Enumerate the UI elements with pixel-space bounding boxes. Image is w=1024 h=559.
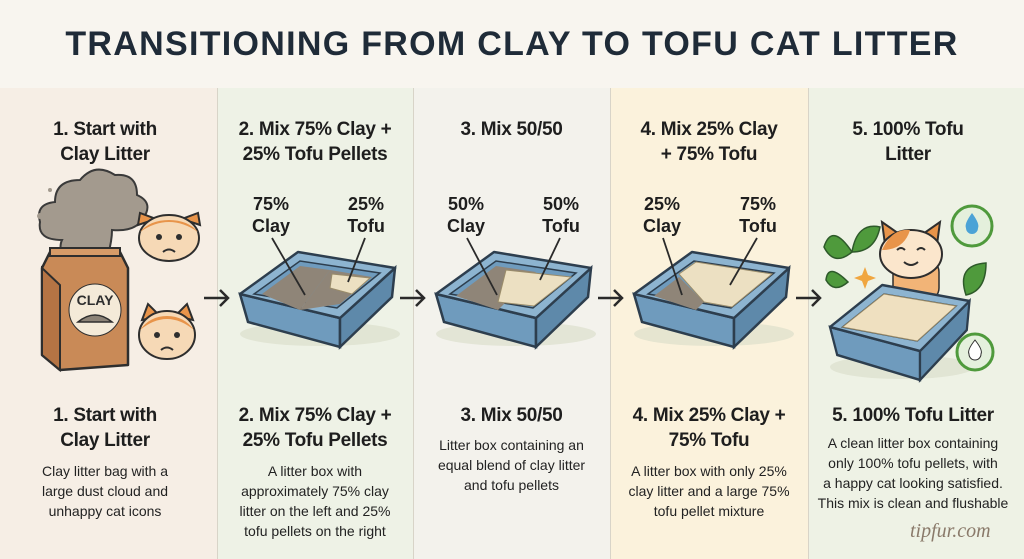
step 1 heading <box>53 119 157 165</box>
icon: leaves <box>824 226 986 295</box>
step 2 heading: 25% Tofu Pellets <box>243 144 387 165</box>
step 2 labels: 75% <box>253 194 289 214</box>
step 2 litter box <box>240 252 400 347</box>
arrows <box>204 290 820 306</box>
step 5 heading: 5. 100% Tofu <box>852 119 964 140</box>
step 4 heading: + 75% Tofu <box>661 144 757 165</box>
icon: unhappy cat bottom <box>139 304 195 359</box>
step 5 bottom text: a happy cat looking satisfied. <box>823 475 1003 491</box>
step 2 bottom text: 25% Tofu Pellets <box>243 430 387 451</box>
step 1 bottom text <box>42 405 168 519</box>
step 2 bottom text: approximately 75% clay <box>241 483 389 499</box>
step 5 happy cat <box>880 222 942 300</box>
step 3 labels: Clay <box>447 216 485 236</box>
step 5 bottom text: only 100% tofu pellets, with <box>828 455 998 471</box>
step 1 bottom text: large dust cloud and <box>42 483 168 499</box>
step 4 labels: Tofu <box>739 216 777 236</box>
step 3 bottom text: and tofu pellets <box>464 477 559 493</box>
step 3 labels: 50% <box>543 194 579 214</box>
step 5 bottom text: A clean litter box containing <box>828 435 998 451</box>
step 3 labels <box>447 194 580 236</box>
step 5 heading <box>852 119 964 165</box>
watermark: tipfur.com <box>910 520 991 542</box>
step 4 heading <box>640 119 778 165</box>
step 2 bottom text: tofu pellets on the right <box>244 523 386 539</box>
step 3 bottom text: equal blend of clay litter <box>438 457 585 473</box>
icon: water drop circle <box>952 206 992 246</box>
step 5 bottom text <box>818 405 1008 511</box>
step 4 bottom text: 75% Tofu <box>669 430 749 451</box>
step 1 bottom text: unhappy cat icons <box>49 503 161 519</box>
step 4 bottom text: clay litter and a large 75% <box>628 483 790 499</box>
step 3 bottom text: 3. Mix 50/50 <box>460 405 563 426</box>
step 3 bottom text <box>438 405 585 493</box>
step 2 bottom text: A litter box with <box>268 463 362 479</box>
step 1 heading: Clay Litter <box>60 144 150 165</box>
step 4 bottom text: A litter box with only 25% <box>631 463 787 479</box>
step 2 heading: 2. Mix 75% Clay + <box>239 119 391 140</box>
step 5 bottom text: 5. 100% Tofu Litter <box>832 405 994 426</box>
step 3 labels: 50% <box>448 194 484 214</box>
step 1 heading: 1. Start with <box>53 119 157 140</box>
icon: unhappy cat top <box>138 213 200 261</box>
step 5 litter box <box>830 285 974 380</box>
step 2 labels: 25% <box>348 194 384 214</box>
illustrations <box>37 168 994 383</box>
icon: flushable drop circle <box>957 334 993 370</box>
step 4 labels: 75% <box>740 194 776 214</box>
step 2 labels <box>252 194 385 236</box>
step 3 litter box <box>436 252 596 347</box>
step 1 bottom text: 1. Start with <box>53 405 157 426</box>
step 2 labels: Tofu <box>347 216 385 236</box>
step 3 labels: Tofu <box>542 216 580 236</box>
step 4 labels: Clay <box>643 216 681 236</box>
step 4 heading: 4. Mix 25% Clay <box>640 119 778 140</box>
step 2 labels: Clay <box>252 216 290 236</box>
step 4 litter box <box>634 252 794 347</box>
step 2 bottom text <box>239 405 391 539</box>
step 1 bottom text: Clay litter bag with a <box>42 463 168 479</box>
step 4 bottom text: 4. Mix 25% Clay + <box>633 405 785 426</box>
step 5 heading: Litter <box>885 144 931 165</box>
step 2 bottom text: 2. Mix 75% Clay + <box>239 405 391 426</box>
step 4 bottom text <box>628 405 790 519</box>
step 3 bottom text: Litter box containing an <box>439 437 584 453</box>
step 1 bottom text: Clay Litter <box>60 430 150 451</box>
step 4 labels: 25% <box>644 194 680 214</box>
top band <box>0 0 1024 88</box>
step 3 heading: 3. Mix 50/50 <box>460 119 563 140</box>
step 2 bottom text: litter on the left and 25% <box>240 503 390 519</box>
step 5 bottom text: This mix is clean and flushable <box>818 495 1008 511</box>
step 2 heading <box>239 119 391 165</box>
icon: sparkle <box>854 267 876 289</box>
icon: clay bag with dust cloud <box>37 170 147 370</box>
icon: clay bag with dust cloud: CLAY <box>77 292 114 308</box>
step 4 labels <box>643 194 777 236</box>
step 4 bottom text: tofu pellet mixture <box>654 503 764 519</box>
column backgrounds <box>0 88 217 559</box>
title: TRANSITIONING FROM CLAY TO TOFU CAT LITTER <box>65 25 959 63</box>
